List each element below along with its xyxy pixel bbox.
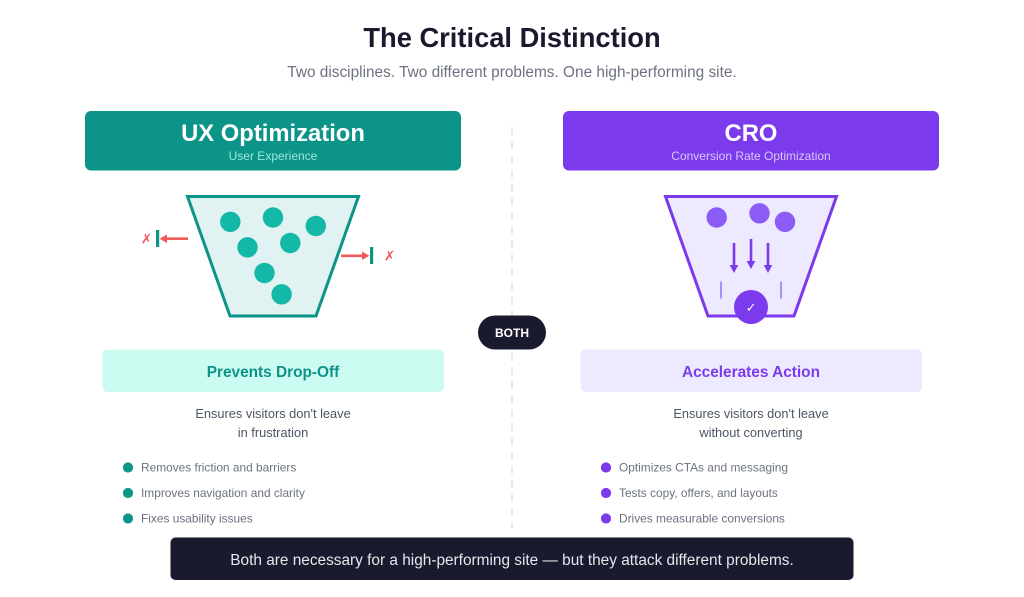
UX header: UX Optimization <box>181 120 365 147</box>
UX bullet list: Removes friction and barriers <box>141 460 296 474</box>
subtitle: Two disciplines. Two different problems. One high-performing site. <box>287 64 737 81</box>
CRO funnel with guided visitors: ✓ <box>746 300 756 315</box>
UX funnel with leaking visitors <box>141 196 395 316</box>
UX bullet list <box>123 460 305 526</box>
CRO bullet list: Optimizes CTAs and messaging <box>619 460 788 474</box>
UX funnel with leaking visitors: ✗ <box>384 248 395 264</box>
UX header: User Experience <box>229 149 318 163</box>
CRO description <box>673 406 829 440</box>
UX header <box>85 111 461 170</box>
CRO description: without converting <box>698 425 803 440</box>
CRO outcome box <box>580 350 922 392</box>
bottom banner <box>170 538 854 580</box>
CRO header: Conversion Rate Optimization <box>671 149 831 163</box>
panel: UX Optimization <box>85 111 461 526</box>
CRO header: CRO <box>725 120 777 147</box>
CRO bullet list <box>601 460 788 526</box>
CRO header <box>563 111 939 170</box>
UX bullet list: Fixes usability issues <box>141 512 253 526</box>
CRO funnel with guided visitors <box>666 196 836 324</box>
CRO bullet list: Drives measurable conversions <box>619 512 785 526</box>
CRO bullet list: Tests copy, offers, and layouts <box>619 486 778 500</box>
UX description: Ensures visitors don't leave <box>195 406 351 421</box>
UX funnel with leaking visitors: ✗ <box>141 232 152 246</box>
UX bullet list: Improves navigation and clarity <box>141 486 305 500</box>
panel: CRO <box>563 111 939 526</box>
title: The Critical Distinction <box>363 22 661 53</box>
UX outcome box: Prevents Drop-Off <box>207 364 340 381</box>
bottom banner: Both are necessary for a high-performing site — but they attack different problems. <box>230 552 794 569</box>
UX description: in frustration <box>238 425 308 440</box>
UX outcome box <box>102 350 444 392</box>
BOTH badge <box>478 316 546 350</box>
BOTH badge: BOTH <box>495 326 529 340</box>
UX description <box>195 406 351 440</box>
CRO outcome box: Accelerates Action <box>682 364 820 381</box>
CRO description: Ensures visitors don't leave <box>673 406 829 421</box>
